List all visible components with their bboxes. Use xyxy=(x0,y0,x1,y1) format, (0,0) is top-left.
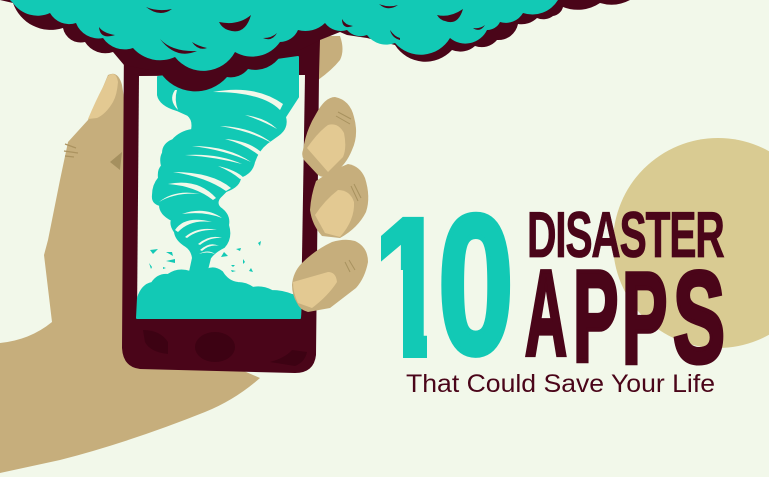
middle fingernail xyxy=(315,190,354,237)
title xyxy=(381,211,724,392)
phone screen xyxy=(137,75,305,318)
shadow notch xyxy=(110,152,122,170)
ring finger xyxy=(292,240,368,312)
cloud shadow xyxy=(0,0,630,91)
phone reflection left xyxy=(143,330,168,354)
index finger xyxy=(302,97,356,177)
finger wrinkles xyxy=(336,112,361,272)
word APPS: P xyxy=(573,243,618,389)
palm and thumb xyxy=(0,74,260,473)
index fingernail xyxy=(307,124,345,172)
hand xyxy=(0,36,342,473)
flying debris xyxy=(149,241,261,272)
knuckle wrinkles xyxy=(64,144,78,157)
phone body xyxy=(122,40,320,373)
word DISASTER: DISASTER xyxy=(527,200,725,271)
thumb base behind phone xyxy=(315,36,342,80)
cloud body xyxy=(10,0,558,71)
home button xyxy=(195,332,235,362)
storm cloud xyxy=(0,0,630,91)
tornado highlights xyxy=(159,90,283,254)
word APPS xyxy=(525,243,725,391)
tornado and ground xyxy=(137,57,301,318)
middle finger xyxy=(310,164,368,238)
number 10: 1 xyxy=(367,174,450,401)
word APPS: S xyxy=(673,244,725,390)
tornado illustration xyxy=(137,57,301,318)
background circle xyxy=(613,138,769,348)
word APPS: A xyxy=(525,246,567,382)
number 10: 0 xyxy=(438,173,514,395)
phone reflection right xyxy=(270,350,307,366)
ring fingernail xyxy=(293,272,337,308)
subtitle: That Could Save Your Life xyxy=(406,370,715,398)
number 10 xyxy=(381,212,510,358)
word APPS: P xyxy=(622,245,667,391)
fingers xyxy=(292,97,368,312)
phone xyxy=(122,40,320,373)
thumb nail xyxy=(88,74,118,119)
cloud crescents xyxy=(99,4,485,54)
